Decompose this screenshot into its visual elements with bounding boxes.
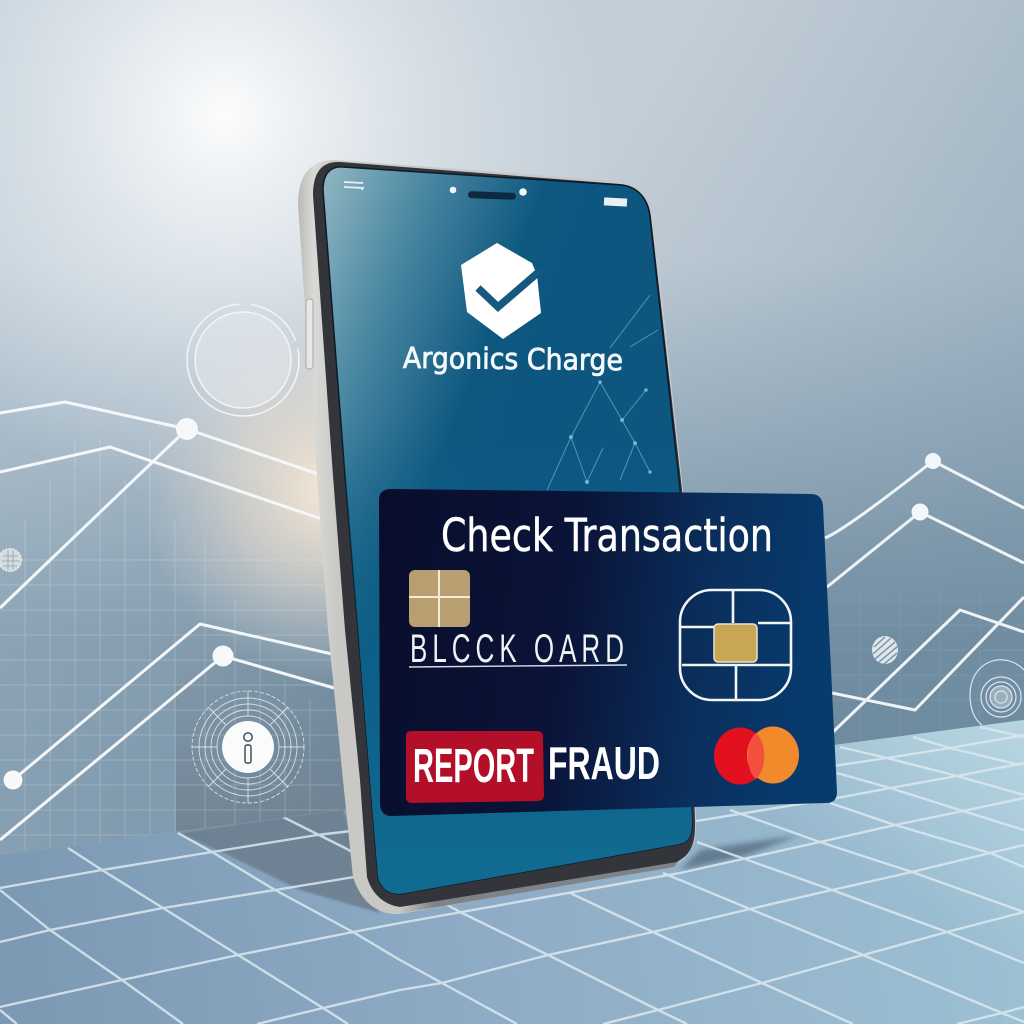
left chart lines	[0, 402, 334, 840]
phone silver body	[298, 160, 696, 914]
chart dots	[4, 418, 234, 790]
credit card	[379, 489, 837, 816]
battery indicator	[604, 197, 627, 207]
camera dot left	[450, 187, 456, 193]
icon: right concentric rings	[970, 660, 1024, 725]
camera dot right	[519, 188, 527, 196]
report fraud button	[406, 731, 660, 803]
gold chip	[409, 570, 470, 627]
info glyph	[244, 733, 252, 763]
emv chip icon	[680, 590, 791, 700]
right chart lines	[825, 453, 1024, 732]
floor with perspective grid	[0, 720, 1024, 1024]
report fraud button: FRAUD	[548, 737, 660, 789]
status icon: menu	[344, 182, 363, 190]
phone side button	[306, 299, 313, 369]
speaker slot	[468, 191, 516, 200]
icon: ring target	[187, 304, 299, 416]
phone floor shadow	[0, 727, 1024, 1024]
card body	[379, 489, 837, 816]
app name: Argonics Charge	[403, 341, 623, 377]
chart dots	[912, 453, 941, 520]
report fraud button: REPORT	[413, 740, 534, 793]
phone screen	[323, 167, 692, 894]
phone	[298, 160, 696, 914]
card heading: Check Transaction	[441, 509, 773, 562]
icon: info radar	[192, 691, 304, 803]
logo: hexagon check	[461, 243, 541, 339]
phone bottom lip	[396, 845, 690, 914]
icon: small tree globe	[0, 548, 22, 582]
block card label: BLCCK OARD	[410, 626, 624, 671]
network pattern	[547, 295, 658, 490]
icon: striped ball	[872, 636, 898, 664]
phone bezel	[313, 162, 695, 907]
mastercard logo	[714, 726, 799, 784]
